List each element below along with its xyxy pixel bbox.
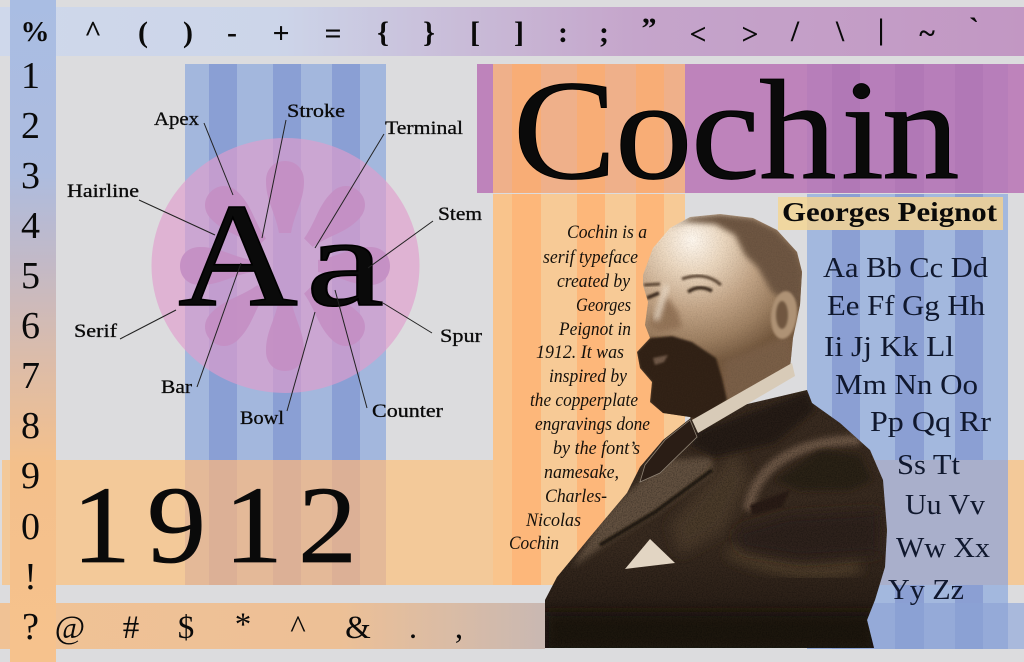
top row of symbols: ~ (919, 17, 935, 50)
top row of symbols: ` (969, 12, 979, 45)
left column numerals: 8 (21, 405, 40, 447)
top row of symbols (84, 12, 979, 51)
lower arm highlight (730, 550, 860, 570)
bottom row of symbols: @ (55, 610, 85, 646)
moustache highlight (653, 355, 668, 365)
anatomy labels: Stroke (287, 101, 345, 122)
alphabet specimen: Ee Ff Gg Hh (827, 291, 985, 322)
anatomy labels: Terminal (385, 118, 463, 139)
anatomy labels: Bowl (240, 408, 284, 429)
top row of symbols: > (741, 18, 759, 51)
tie (640, 420, 697, 482)
name label: Georges Peignot (782, 197, 997, 227)
left column numerals: 7 (21, 355, 40, 397)
arm shadow (735, 510, 880, 560)
cloth grain (545, 390, 887, 648)
nose shadow (648, 296, 682, 332)
suit jacket (545, 390, 887, 648)
alphabet specimen: Aa Bb Cc Dd (823, 253, 988, 284)
brows (644, 276, 721, 285)
description text block: Peignot in (558, 319, 631, 340)
left column numerals: ? (22, 606, 39, 648)
anatomy labels: Counter (372, 401, 444, 422)
left column numerals: 6 (21, 305, 40, 347)
sleeve crease (750, 490, 790, 515)
panel: title band (477, 64, 1024, 193)
alphabet specimen: Ww Xx (896, 533, 990, 564)
anatomy labels: Spur (440, 326, 483, 347)
top row of symbols: ] (514, 16, 524, 49)
description text block: 1912. It was (536, 342, 624, 363)
upper collar shadow (690, 392, 815, 457)
ear (769, 290, 799, 340)
top row of symbols: | (878, 13, 884, 46)
neck and head (637, 214, 802, 420)
top row of symbols: - (227, 16, 237, 49)
hair (670, 214, 803, 310)
top row of symbols: / (790, 15, 800, 48)
alphabet specimen: Yy Zz (888, 575, 964, 606)
alphabet specimen: Pp Qq Rr (870, 407, 992, 438)
top row of symbols: ^ (84, 15, 102, 48)
alphabet specimen: Uu Vv (905, 490, 985, 521)
left column numerals: % (20, 16, 50, 48)
description text block: the copperplate (530, 390, 638, 411)
anatomy labels: Hairline (67, 181, 139, 202)
top row of symbols: { (377, 16, 389, 49)
left column numerals: ! (24, 556, 37, 598)
pocket square (625, 539, 675, 569)
left column numerals: 4 (21, 205, 40, 247)
description text block: Nicolas (525, 510, 581, 531)
description text block: inspired by (549, 366, 628, 387)
description text block: Charles- (545, 486, 607, 507)
lapel edge (600, 470, 712, 545)
top row of symbols: [ (470, 16, 480, 49)
top row of symbols: + (272, 17, 290, 50)
pink circle (152, 138, 420, 393)
portrait of Georges Peignot (540, 205, 900, 655)
anatomy labels: Apex (154, 109, 200, 130)
letter anatomy diagram (67, 101, 483, 429)
bottom row of symbols: , (455, 610, 463, 646)
top row of symbols: ” (642, 12, 656, 45)
leader lines (120, 120, 433, 411)
alphabet specimen: Ss Tt (897, 450, 960, 481)
top row of symbols: ( (138, 16, 148, 49)
top row of symbols: } (423, 16, 435, 49)
alphabet specimen: Ii Jj Kk Ll (824, 332, 954, 363)
chest tone (672, 456, 748, 552)
top row of symbols: < (689, 18, 707, 51)
description text block: serif typeface (543, 247, 638, 268)
anatomy labels: Bar (161, 377, 193, 398)
anatomy labels (67, 101, 483, 429)
left column numerals (20, 16, 50, 648)
title: Cochin (513, 52, 959, 210)
description text block: by the font’s (553, 438, 640, 459)
beard (637, 336, 727, 420)
panel: blue stripes behind alphabet (807, 194, 1008, 649)
bottom row of symbols: & (345, 610, 371, 646)
shoulder highlight (748, 440, 860, 510)
lapel highlight (573, 457, 713, 567)
bottom row of symbols (55, 607, 463, 646)
hem shadow (545, 612, 875, 652)
skin grain (643, 214, 800, 396)
alphabet specimen (823, 253, 992, 606)
bottom row of symbols: $ (178, 610, 194, 646)
description text block: Georges (576, 295, 631, 316)
alphabet specimen: Mm Nn Oo (835, 370, 978, 401)
left column numerals: 1 (21, 55, 40, 97)
flower petals (180, 161, 390, 371)
top row of symbols: : (558, 16, 568, 49)
neck shadow (727, 340, 793, 393)
bottom row of symbols: ^ (290, 610, 306, 646)
description text block: created by (557, 271, 631, 292)
panel: orange stripes column (493, 194, 685, 585)
description text block: engravings done (535, 414, 650, 435)
top row of symbols: ) (183, 16, 193, 49)
left column numerals: 9 (21, 455, 40, 497)
eyes (647, 288, 712, 298)
panel: left numeral column (10, 0, 56, 662)
description text block: namesake, (544, 462, 619, 483)
top row of symbols: ; (599, 16, 609, 49)
nose highlight (656, 285, 667, 320)
top row of symbols: \ (835, 15, 845, 48)
specimen letter a: a (306, 191, 384, 333)
specimen letter A: A (178, 173, 298, 337)
shirt collar (692, 363, 795, 433)
panel: top symbol band (0, 7, 1024, 56)
top row of symbols: = (324, 17, 342, 50)
description text block: Cochin (509, 533, 559, 554)
bottom row of symbols: * (235, 607, 251, 643)
panel: bottom symbol band (0, 603, 1024, 649)
description text block (509, 222, 650, 554)
left column numerals: 5 (21, 255, 40, 297)
left column numerals: 0 (21, 506, 40, 548)
anatomy labels: Stem (438, 204, 482, 225)
left column numerals: 2 (21, 105, 40, 147)
sleeve shadow (775, 450, 872, 490)
left column numerals: 3 (21, 155, 40, 197)
anatomy labels: Serif (74, 321, 118, 342)
panel: blue stripes behind letter anatomy (185, 64, 386, 460)
bottom row of symbols: # (123, 610, 139, 646)
bottom row of symbols: . (409, 610, 417, 646)
panel: orange year band (2, 460, 1024, 585)
description text block: Cochin is a (567, 222, 647, 243)
year 1912: 1912 (72, 464, 357, 586)
